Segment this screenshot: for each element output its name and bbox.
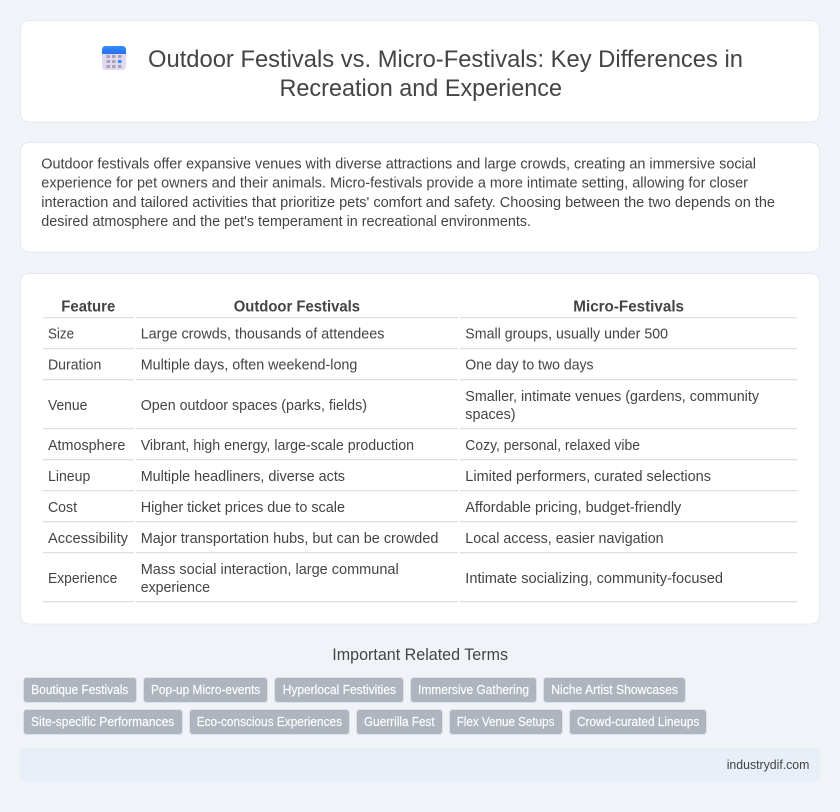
- row: duration: Duration: [48, 358, 101, 374]
- tag: Boutique Festivals: Boutique Festivals: [31, 683, 128, 697]
- row: venue: Open outdoor spaces (parks, fields): [141, 398, 367, 414]
- footer: [20, 748, 820, 782]
- table header: [61, 299, 684, 316]
- row: cost: Higher ticket prices due to scale: [141, 500, 345, 516]
- row: accessibility: Major transportation hubs, but can be crowded: [141, 531, 438, 547]
- row: accessibility: Accessibility: [48, 531, 129, 547]
- panel: comparison table: [20, 274, 820, 624]
- intro text block: interaction and tailored activities that prioritize pets' comfort and safety. Choosing between the two depends on the: [41, 195, 775, 211]
- row: venue: [48, 389, 760, 423]
- panel: introduction: [20, 142, 820, 252]
- tag: Eco-conscious Experiences: [190, 710, 350, 734]
- row: experience: Intimate socializing, community-focused: [465, 571, 723, 587]
- row: lineup: [48, 469, 711, 485]
- title: Recreation and Experience: [280, 75, 562, 102]
- title: Outdoor Festivals vs. Micro-Festivals: Key Differences in: [148, 46, 743, 73]
- intro text block: [41, 156, 775, 230]
- row: cost: [48, 500, 682, 516]
- row: accessibility: [48, 531, 664, 547]
- row: venue: Smaller, intimate venues (gardens, community: [465, 389, 760, 405]
- tag: Guerrilla Fest: Guerrilla Fest: [364, 715, 435, 729]
- row: atmosphere: Cozy, personal, relaxed vibe: [465, 438, 640, 454]
- row: cost: Affordable pricing, budget-friendly: [465, 500, 682, 516]
- tag: Pop-up Micro-events: Pop-up Micro-events: [151, 683, 260, 697]
- table header: Feature: [61, 299, 115, 316]
- row: lineup: Lineup: [48, 469, 90, 485]
- tag: Immersive Gathering: [410, 678, 536, 702]
- row: size: Size: [48, 326, 74, 342]
- row: lineup: Limited performers, curated selections: [465, 469, 711, 485]
- row: atmosphere: Vibrant, high energy, large-scale production: [141, 438, 414, 454]
- intro text block: desired atmosphere and the pet's temperament in recreational environments.: [41, 214, 531, 230]
- tag: Hyperlocal Festivities: [274, 678, 404, 702]
- row: experience: experience: [141, 580, 210, 596]
- tag: Flex Venue Setups: [450, 710, 562, 734]
- row: duration: Multiple days, often weekend-long: [141, 358, 357, 374]
- tag: Eco-conscious Experiences: Eco-conscious Experiences: [197, 715, 342, 729]
- row: experience: [48, 562, 723, 596]
- tag: Site-specific Performances: [24, 710, 182, 734]
- row: duration: [48, 358, 594, 374]
- tag: Pop-up Micro-events: [144, 678, 268, 702]
- tag: Niche Artist Showcases: [544, 678, 686, 702]
- row: duration: One day to two days: [465, 358, 594, 374]
- row: size: [48, 326, 668, 342]
- footer: industrydif.com: [727, 757, 809, 772]
- table header: Outdoor Festivals: [234, 299, 360, 316]
- row: size: Small groups, usually under 500: [465, 326, 668, 342]
- related term tags: [24, 678, 706, 734]
- tag: Immersive Gathering: Immersive Gathering: [418, 683, 529, 697]
- tag: Flex Venue Setups: Flex Venue Setups: [457, 715, 554, 729]
- row: accessibility: Local access, easier navigation: [465, 531, 664, 547]
- row: lineup: Multiple headliners, diverse acts: [141, 469, 345, 485]
- row: cost: Cost: [48, 500, 77, 516]
- row: venue: Venue: [48, 398, 87, 414]
- title: [148, 46, 743, 102]
- row: venue: spaces): [465, 407, 516, 423]
- row: atmosphere: Atmosphere: [48, 438, 125, 454]
- tag: Guerrilla Fest: [356, 710, 442, 734]
- row: size: Large crowds, thousands of attendees: [141, 326, 384, 342]
- intro text block: Outdoor festivals offer expansive venues with diverse attractions and large crowds, creating an immersive social: [41, 156, 756, 172]
- table header: Micro-Festivals: [573, 299, 684, 316]
- icon: calendar: [102, 46, 126, 70]
- tag: Hyperlocal Festivities: Hyperlocal Festivities: [283, 683, 396, 697]
- row: experience: Mass social interaction, large communal: [141, 562, 399, 578]
- tag: Niche Artist Showcases: Niche Artist Showcases: [551, 683, 678, 697]
- tag: Site-specific Performances: Site-specific Performances: [31, 715, 174, 729]
- tag: Boutique Festivals: [24, 678, 136, 702]
- row: experience: Experience: [48, 571, 117, 587]
- heading: related terms: Important Related Terms: [332, 646, 508, 664]
- tag: Crowd-curated Lineups: [570, 710, 706, 734]
- row: atmosphere: [48, 438, 640, 454]
- tag: Crowd-curated Lineups: Crowd-curated Lineups: [577, 715, 699, 729]
- intro text block: experience for pet owners and their animals. Micro-festivals provide a more intimate setting, allowing for closer: [41, 175, 748, 191]
- header panel: [20, 20, 820, 122]
